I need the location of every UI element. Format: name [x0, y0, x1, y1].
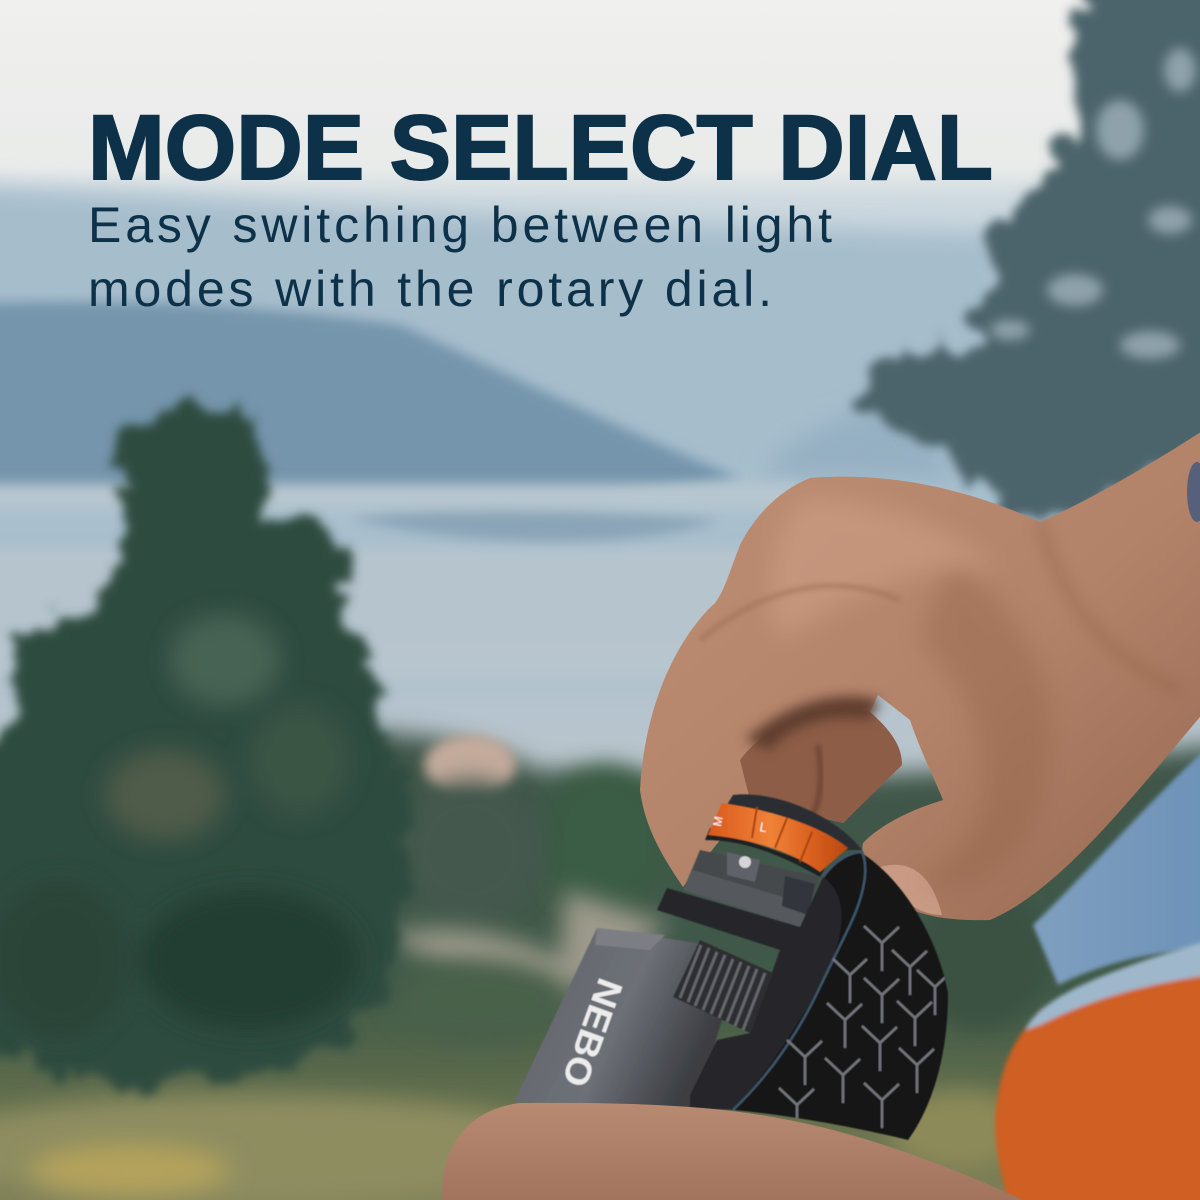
NEBO logo: NEBO	[554, 973, 631, 1093]
headband Y pattern	[779, 926, 952, 1130]
title: MODE SELECT DIAL	[88, 97, 993, 199]
headband seam	[733, 852, 865, 1110]
lamp neck	[683, 850, 820, 927]
tree gaps	[990, 48, 1196, 359]
distant mountains	[0, 185, 1000, 497]
tree highlights	[0, 615, 360, 1040]
dial letters: M	[710, 815, 726, 828]
black bracket	[657, 877, 866, 1110]
lake reflections	[0, 484, 800, 678]
hand silhouette	[640, 426, 1200, 920]
lamp body	[514, 928, 725, 1108]
distant shoreline and ground	[0, 732, 1200, 1200]
black dial cap	[725, 794, 862, 850]
thumb nail	[880, 865, 942, 915]
subtitle: Easy switching between light	[88, 197, 832, 253]
subtitle	[88, 197, 832, 317]
lower thumb	[442, 1103, 1045, 1200]
curled fingers	[740, 709, 902, 823]
distant tree right	[850, 0, 1200, 525]
dial base ring	[705, 828, 825, 877]
hand	[640, 426, 1200, 920]
orange dial ring	[708, 803, 848, 872]
blurred foreground tree	[0, 403, 411, 1083]
headband	[733, 852, 952, 1140]
blue jacket sleeve	[1033, 745, 1200, 985]
knurled wheel	[673, 940, 773, 1033]
palm shading	[920, 560, 1052, 888]
orange dial ring: L	[758, 819, 768, 835]
orange jacket	[995, 940, 1200, 1200]
subtitle: modes with the rotary dial.	[88, 261, 772, 317]
wrist tattoo	[1187, 462, 1200, 522]
headlamp	[514, 794, 952, 1140]
